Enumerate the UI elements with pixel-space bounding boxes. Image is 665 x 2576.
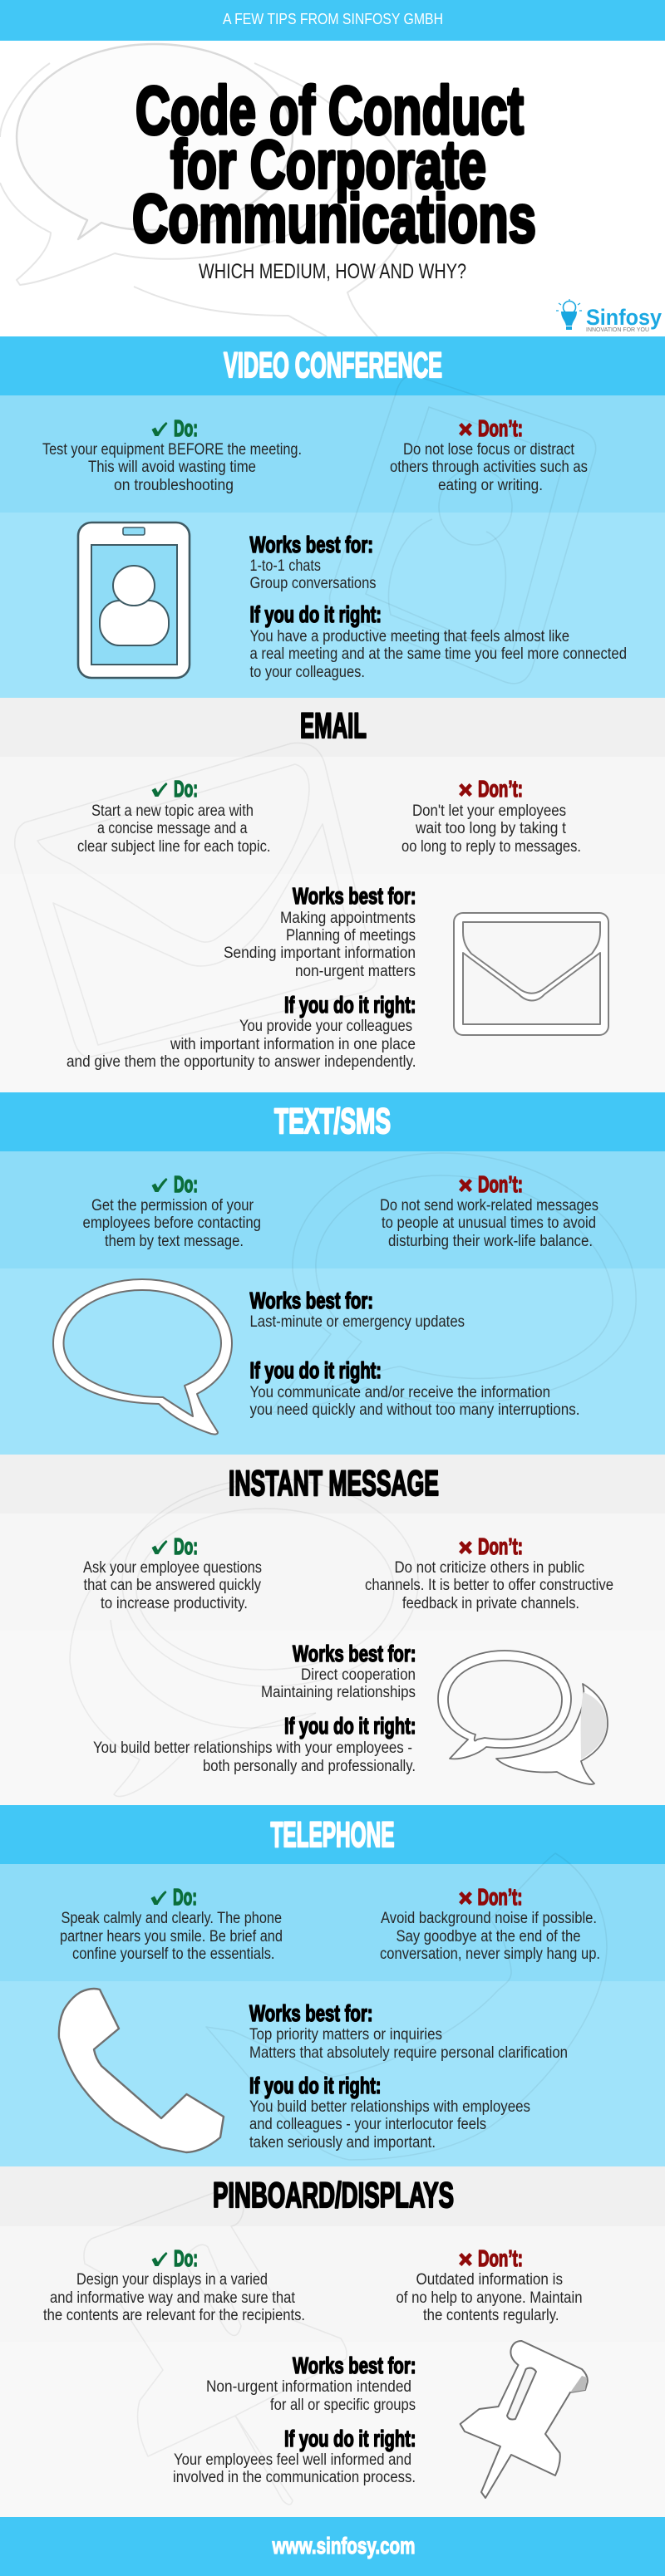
don't text: [396, 2271, 582, 2324]
works best for: Last-minute or emergency updates: [249, 1313, 465, 1331]
icon: light bulb: [556, 299, 582, 330]
if you do it right: [173, 2426, 416, 2486]
do text: [77, 802, 271, 856]
speech bubble watermark: [271, 1153, 636, 1412]
if you do it right: If you do it right:: [249, 601, 382, 627]
if you do it right: Your employees feel well informed and: [174, 2451, 411, 2469]
if you do it right: and colleagues - your interlocutor feels: [249, 2116, 486, 2133]
column: do: [77, 776, 271, 856]
works best for: [249, 1288, 465, 1331]
front bubble: [438, 1651, 571, 1759]
icon: cross: [459, 1892, 472, 1905]
section bands: [0, 698, 665, 1092]
works best for: Making appointments: [280, 910, 416, 927]
icon: envelope: [454, 913, 608, 1035]
heading: EMAIL: [300, 707, 367, 746]
do text: clear subject line for each topic.: [77, 838, 271, 856]
if you do it right: If you do it right:: [284, 992, 416, 1018]
if you do it right: [249, 1357, 580, 1419]
don't text: the contents regularly.: [423, 2307, 559, 2324]
don't text: Outdated information is: [416, 2271, 563, 2289]
don't text: Don't let your employees: [412, 802, 566, 820]
logo wordmark: Sinfosy: [586, 305, 662, 330]
don't label: Don’t:: [478, 776, 523, 802]
don't label: Don’t:: [478, 1533, 523, 1559]
do text: Speak calmly and clearly. The phone: [62, 1910, 282, 1927]
title: [132, 73, 536, 257]
do label: Do:: [174, 1533, 198, 1559]
if you do it right: and give them the opportunity to answer independently.: [66, 1053, 416, 1071]
speech bubbles watermark: [70, 1479, 418, 1797]
don't text: Do not criticize others in public: [394, 1559, 584, 1577]
column: don't: [365, 1533, 613, 1612]
handset watermark: [206, 1853, 607, 2160]
don't text: [390, 441, 588, 494]
don't text: [380, 1197, 598, 1250]
if you do it right: both personally and professionally.: [203, 1758, 416, 1775]
do text: and informative way and make sure that: [50, 2289, 296, 2307]
do text: [60, 1910, 283, 1963]
column: don't: [390, 415, 588, 494]
don't text: eating or writing.: [438, 477, 543, 494]
icon: push pin: [461, 2341, 588, 2498]
don't text: conversation, never simply hang up.: [380, 1945, 600, 1963]
don't text: feedback in private channels.: [402, 1595, 579, 1612]
don't text: Do not send work-related messages: [380, 1197, 598, 1214]
don't text: Avoid background noise if possible.: [381, 1910, 597, 1927]
heading: INSTANT MESSAGE: [229, 1465, 439, 1504]
don't text: others through activities such as: [390, 459, 588, 476]
do text: This will avoid wasting time: [88, 459, 256, 476]
column: don't: [401, 776, 581, 856]
if you do it right: You communicate and/or receive the information: [249, 1384, 550, 1401]
heading: TEXT/SMS: [274, 1102, 391, 1141]
do text: [83, 1559, 262, 1612]
title: for Corporate: [170, 127, 486, 203]
works best for: [224, 883, 416, 980]
do text: [83, 1197, 261, 1250]
icon: cross: [459, 1541, 472, 1554]
logo tagline: INNOVATION FOR YOU: [586, 326, 649, 333]
envelope watermark: [15, 743, 377, 1057]
push pin watermark: [84, 2187, 347, 2505]
section bands: [0, 336, 665, 698]
works best for: Direct cooperation: [301, 1666, 416, 1684]
if you do it right: If you do it right:: [249, 2073, 381, 2098]
back bubble shading: [581, 1692, 607, 1759]
icon: speech bubble: [53, 1279, 232, 1435]
don't text: Say goodbye at the end of the: [396, 1928, 580, 1945]
if you do it right: to your colleagues.: [249, 664, 365, 681]
works best for: for all or specific groups: [270, 2397, 416, 2414]
banner text: A FEW TIPS FROM SINFOSY GMBH: [223, 11, 443, 27]
works best for: Top priority matters or inquiries: [249, 2026, 442, 2044]
icon: cross: [459, 423, 472, 436]
if you do it right: You have a productive meeting that feels almost like: [249, 628, 569, 645]
do text: confine yourself to the essentials.: [72, 1945, 274, 1963]
don't label: Don’t:: [478, 1171, 523, 1197]
if you do it right: [93, 1713, 416, 1775]
icon: cross: [459, 1179, 472, 1192]
works best for: Works best for:: [293, 883, 416, 909]
background speech bubbles watermark: [0, 44, 411, 336]
works best for: Works best for:: [293, 1641, 416, 1666]
do label: Do:: [174, 776, 198, 802]
do text: Start a new topic area with: [91, 802, 254, 820]
works best for: Planning of meetings: [286, 927, 416, 945]
icon: check: [151, 2252, 168, 2266]
icon: video phone: [78, 523, 190, 678]
works best for: [206, 2353, 416, 2414]
do text: them by text message.: [105, 1233, 244, 1250]
do text: on troubleshooting: [114, 477, 234, 494]
column: don't: [380, 1884, 600, 1963]
if you do it right: If you do it right:: [249, 1357, 382, 1383]
don't text: [401, 802, 581, 856]
if you do it right: You build better relationships with your employees -: [93, 1739, 412, 1757]
do label: Do:: [174, 1171, 198, 1197]
icon: check: [151, 1540, 168, 1554]
works best for: Sending important information: [224, 945, 416, 962]
works best for: Works best for:: [249, 1288, 373, 1313]
icon: two speech bubbles: [438, 1651, 608, 1784]
if you do it right: taken seriously and important.: [249, 2134, 436, 2152]
don't label: Don’t:: [478, 2245, 523, 2271]
if you do it right: involved in the communication process.: [173, 2469, 416, 2486]
don't text: to people at unusual times to avoid: [382, 1214, 596, 1232]
panel: telephone: [0, 1805, 665, 2166]
if you do it right: [249, 601, 627, 681]
panel: email: [0, 698, 665, 1092]
logo: Sinfosy: [556, 299, 662, 333]
do label: Do:: [173, 1884, 197, 1910]
panel: intro header: [0, 0, 665, 336]
panel: video conference: [0, 336, 665, 698]
footer: [0, 2517, 665, 2576]
works best for: [261, 1641, 416, 1701]
if you do it right: [66, 992, 416, 1071]
if you do it right: If you do it right:: [284, 2426, 416, 2451]
if you do it right: [249, 2073, 530, 2152]
don't text: [365, 1559, 613, 1612]
icon: check: [151, 1178, 168, 1192]
works best for: Group conversations: [249, 575, 376, 592]
if you do it right: If you do it right:: [284, 1713, 416, 1739]
works best for: Works best for:: [249, 2000, 372, 2026]
if you do it right: You build better relationships with employees: [249, 2098, 530, 2116]
section bands: [0, 1092, 665, 1455]
works best for: non-urgent matters: [295, 963, 416, 980]
do text: a concise message and a: [97, 820, 248, 837]
don't text: of no help to anyone. Maintain: [396, 2289, 582, 2307]
works best for: Works best for:: [249, 532, 373, 557]
section bands: [0, 1455, 665, 1805]
works best for: [249, 532, 376, 592]
don't label: Don’t:: [477, 1884, 522, 1910]
front bubble inner: [448, 1661, 562, 1741]
if you do it right: You provide your colleagues: [239, 1018, 412, 1035]
panel: pinboard/displays: [0, 2166, 665, 2517]
don't label: Don’t:: [478, 415, 523, 441]
column: do: [83, 1533, 262, 1612]
column: don't: [396, 2245, 582, 2324]
column: do: [83, 1171, 261, 1250]
icon: check: [151, 422, 168, 436]
works best for: Non-urgent information intended: [206, 2378, 411, 2396]
section bands: [0, 1805, 665, 2166]
heading: TELEPHONE: [271, 1816, 394, 1855]
column: do: [43, 2245, 305, 2324]
heading: VIDEO CONFERENCE: [224, 346, 442, 385]
do label: Do:: [174, 415, 198, 441]
panel: text/sms: [0, 1092, 665, 1455]
works best for: Maintaining relationships: [261, 1684, 416, 1701]
phone watermark: [329, 375, 596, 684]
icon: cross: [459, 2253, 472, 2266]
do text: employees before contacting: [83, 1214, 261, 1232]
do text: that can be answered quickly: [83, 1577, 261, 1594]
icon: telephone handset: [59, 1989, 224, 2152]
heading: PINBOARD/DISPLAYS: [213, 2176, 454, 2215]
do text: Test your equipment BEFORE the meeting.: [42, 441, 302, 459]
subtitle: WHICH MEDIUM, HOW AND WHY?: [199, 260, 466, 283]
do text: to increase productivity.: [101, 1595, 248, 1612]
don't text: disturbing their work-life balance.: [388, 1233, 593, 1250]
top banner: [0, 0, 665, 41]
if you do it right: you need quickly and without too many interruptions.: [249, 1401, 580, 1419]
do text: Design your displays in a varied: [76, 2271, 268, 2289]
do text: [42, 441, 302, 494]
do text: partner hears you smile. Be brief and: [60, 1928, 283, 1945]
don't text: wait too long by taking t: [415, 820, 567, 837]
don't text: Do not lose focus or distract: [403, 441, 575, 459]
icon: check: [151, 1891, 166, 1905]
section bands: [0, 2166, 665, 2517]
don't text: oo long to reply to messages.: [401, 838, 581, 856]
works best for: Works best for:: [293, 2353, 416, 2378]
do text: Ask your employee questions: [83, 1559, 262, 1577]
works best for: [249, 2000, 568, 2062]
column: do: [42, 415, 302, 494]
column: do: [60, 1884, 283, 1963]
works best for: 1-to-1 chats: [249, 557, 321, 575]
icon: cross: [459, 783, 472, 797]
do text: [43, 2271, 305, 2324]
back bubble: [496, 1684, 608, 1784]
works best for: Matters that absolutely require personal clarification: [249, 2044, 568, 2062]
panel: instant message: [0, 1455, 665, 1805]
column: don't: [380, 1171, 598, 1250]
do text: the contents are relevant for the recipients.: [43, 2307, 305, 2324]
do text: Get the permission of your: [91, 1197, 254, 1214]
icon: check: [151, 783, 168, 797]
don't text: channels. It is better to offer constructive: [365, 1577, 613, 1594]
website url: www.sinfosy.com: [272, 2533, 416, 2559]
if you do it right: with important information in one place: [170, 1036, 416, 1053]
don't text: [380, 1910, 600, 1963]
do label: Do:: [174, 2245, 198, 2271]
